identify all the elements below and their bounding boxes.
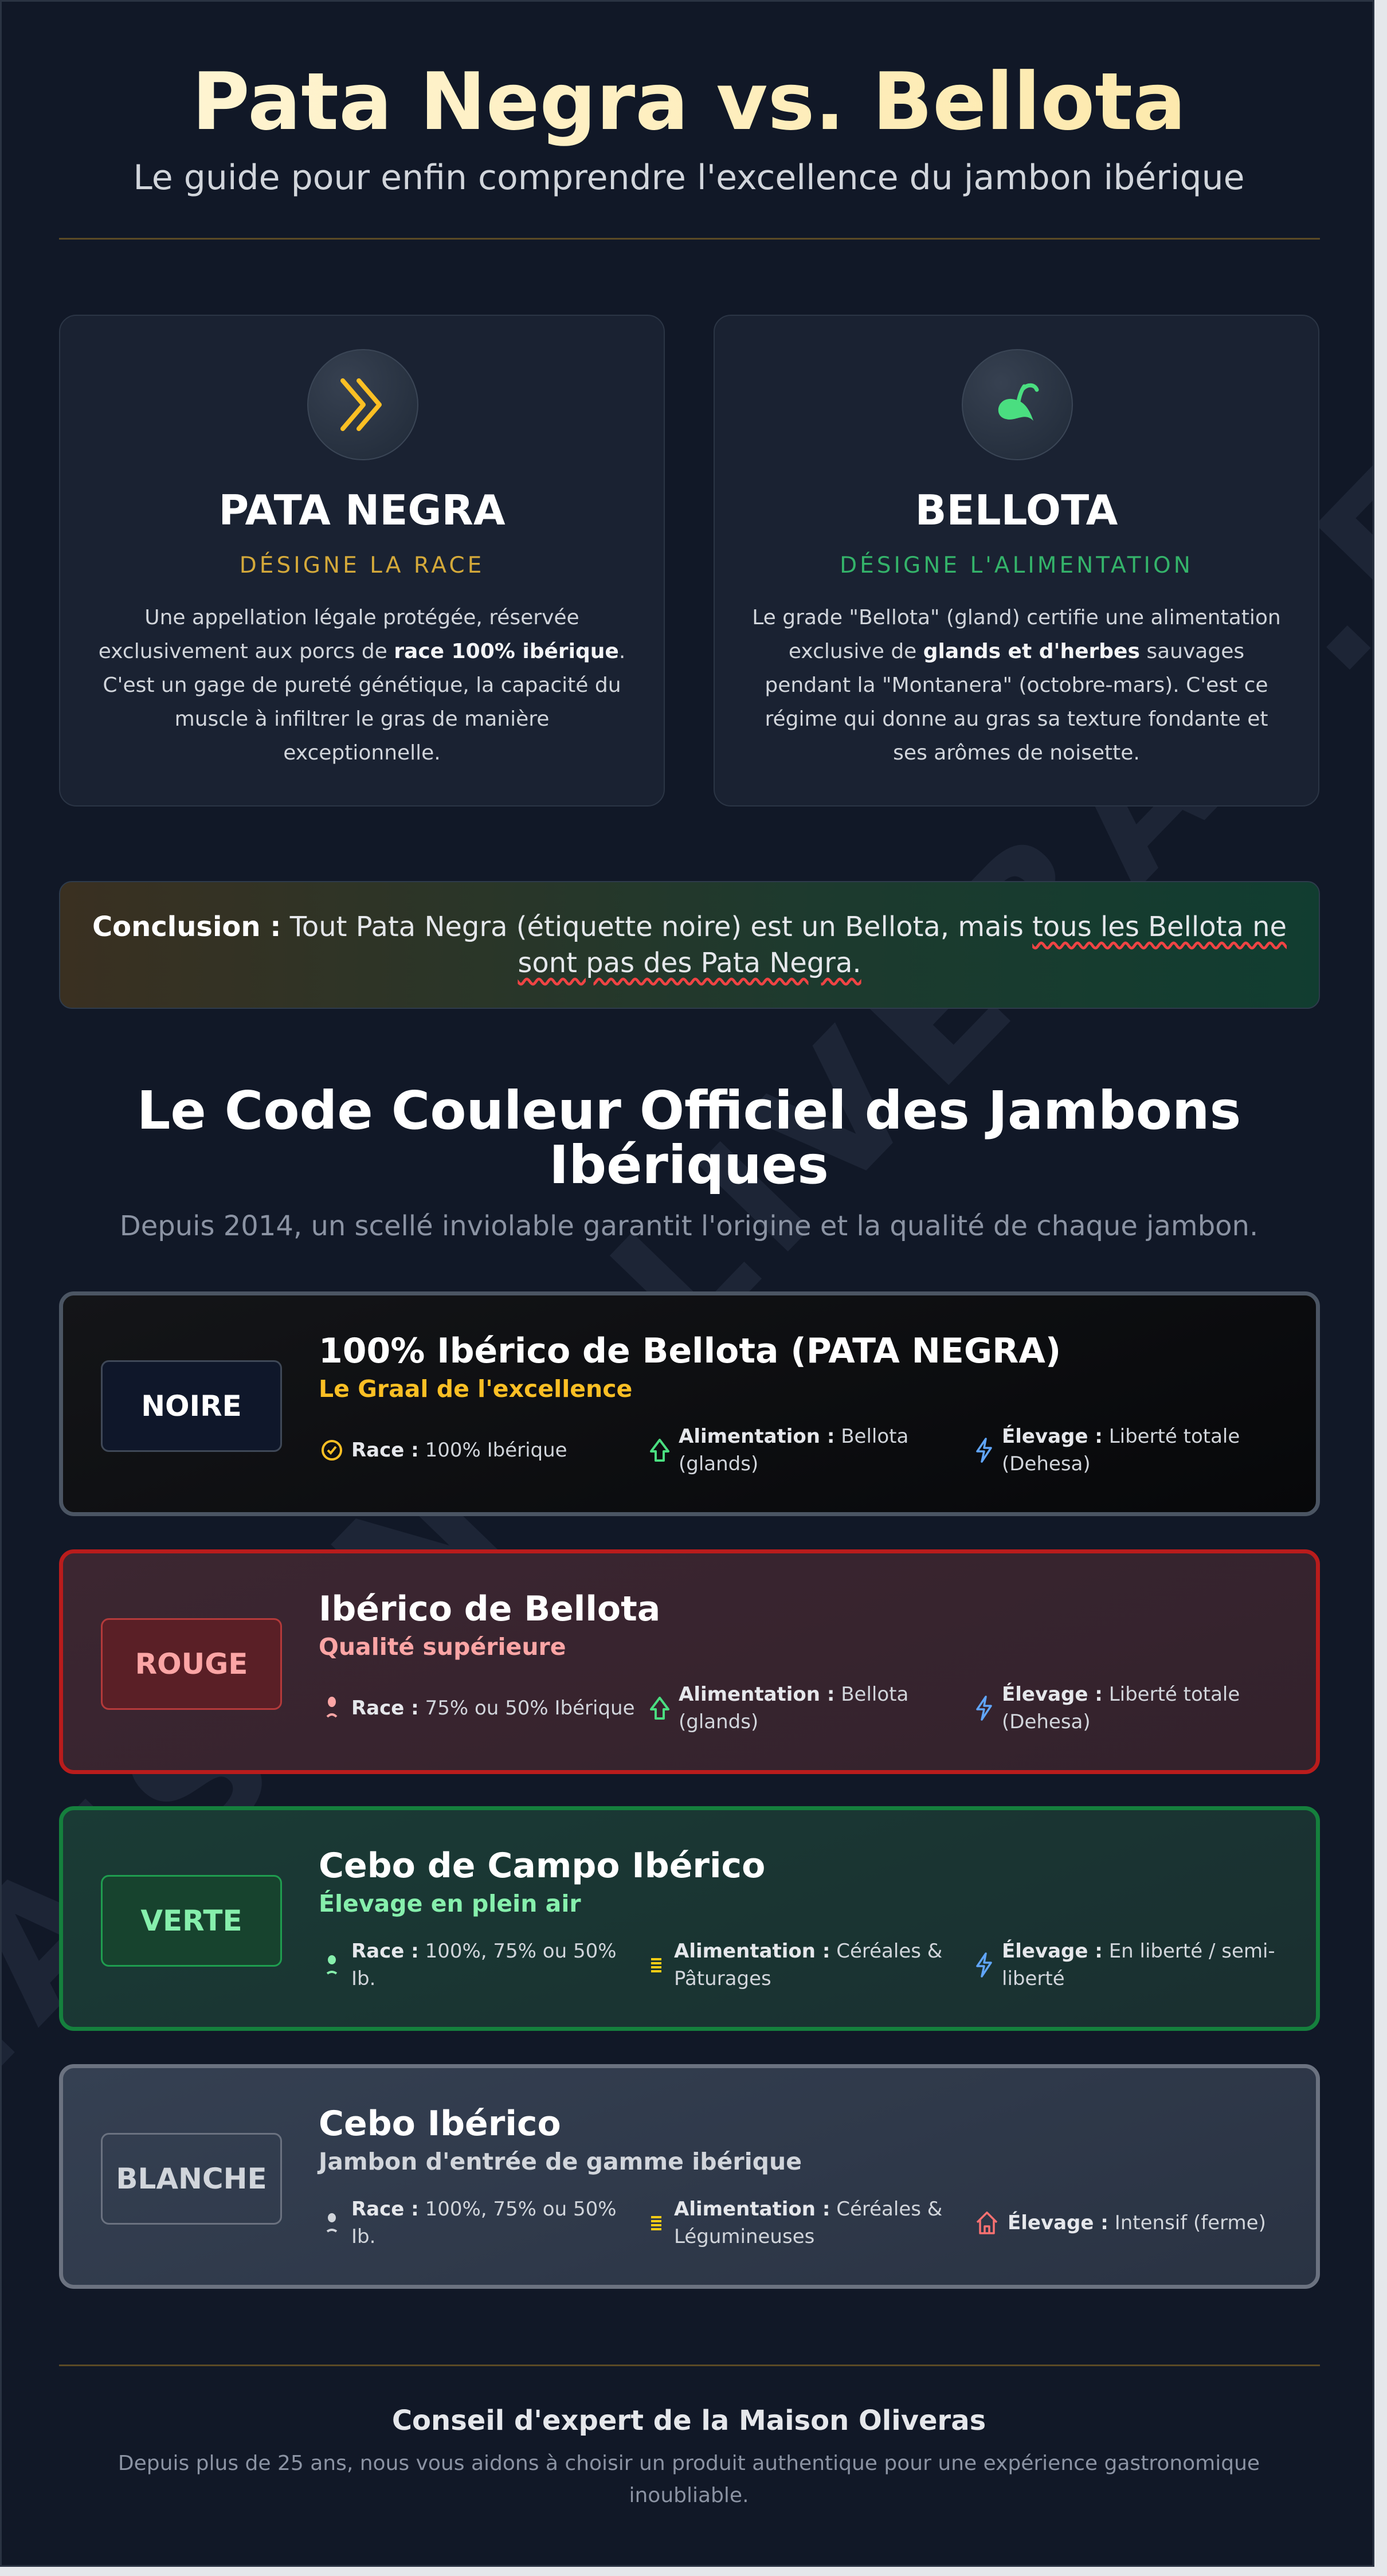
tier title: Ibérico de Bellota [319,1589,660,1629]
feature: race: Race : 100%, 75% ou 50% [351,1940,617,1963]
footer text: Depuis plus de 25 ans, nous vous aidons à choisir un produit authentique pour une expérience gastronomique [118,2452,1260,2475]
badge: VERTE [140,1904,242,1937]
badge: ROUGE [135,1647,248,1681]
text block: Le grade "Bellota" (gland) certifie une alimentation [752,606,1281,629]
subtitle: Le guide pour enfin comprendre l'excellence du jambon ibérique [133,158,1245,198]
footer text [118,2452,1260,2507]
panel: pata negra [59,315,665,807]
footer heading: Conseil d'expert de la Maison Oliveras [392,2405,986,2437]
feature: elevage: (Dehesa) [1002,1453,1091,1475]
feature: alimentation: Pâturages [674,1967,771,1990]
feature: elevage [976,1683,1240,1733]
icon: acorn leaf [962,349,1073,460]
tagline: DÉSIGNE LA RACE [240,553,484,578]
feature: alimentation: (glands) [679,1453,758,1475]
text block: ses arômes de noisette. [893,741,1140,765]
text block: exclusive de glands et d'herbes sauvages [789,640,1244,663]
subtitle: depuis 2014: Depuis 2014, un scellé inviolable garantit l'origine et la qualité de chaque jambon. [120,1210,1258,1242]
badge: BLANCHE [116,2162,267,2195]
badge: NOIRE [141,1389,242,1423]
feature: elevage [976,1425,1240,1475]
text block: Une appellation légale protégée, réservée [144,606,579,629]
feature: race: Race : 75% ou 50% Ibérique [351,1697,635,1720]
feature: elevage: Élevage : Intensif (ferme) [1008,2211,1266,2234]
heading: BELLOTA [915,486,1118,534]
tier subtitle: Élevage en plein air [319,1890,581,1917]
feature: alimentation [650,1683,908,1733]
tier subtitle: Qualité supérieure [319,1633,566,1661]
feature: alimentation [651,2198,942,2248]
heading: code couleur: Ibériques [549,1134,829,1196]
feature: elevage: Élevage : Liberté totale [1002,1683,1240,1706]
feature: alimentation: Alimentation : Céréales & [674,1940,942,1963]
text block [99,606,625,765]
heading: PATA NEGRA [218,486,506,534]
feature: race [327,1940,617,1990]
feature: alimentation: (glands) [679,1710,758,1733]
feature: race: Race : 100% Ibérique [351,1439,567,1462]
footer text: inoubliable. [629,2484,749,2507]
callout: conclusion: Conclusion : Tout Pata Negra (étiquette noire) est un Bellota, mais tous les Bellota ne [92,911,1287,943]
callout: conclusion [59,881,1320,1009]
tagline: DÉSIGNE L'ALIMENTATION [840,553,1193,578]
text block: exclusivement aux porcs de race 100% ibérique. [99,640,625,663]
heading: code couleur [137,1080,1241,1196]
badge [101,1360,282,1452]
tier title: Cebo de Campo Ibérico [319,1846,765,1886]
panel: blanche [59,2064,1320,2289]
text block: muscle à infiltrer le gras de manière [175,707,549,731]
badge [101,2133,282,2225]
feature: elevage: (Dehesa) [1002,1710,1091,1733]
feature: alimentation: Alimentation : Bellota [679,1683,908,1706]
tier title: 100% Ibérico de Bellota (PATA NEGRA) [319,1331,1061,1371]
tier subtitle: Jambon d'entrée de gamme ibérique [319,2148,802,2175]
panel: noire [59,1291,1320,1516]
icon: chevrons [307,349,418,460]
tier subtitle: Le Graal de l'excellence [319,1375,632,1403]
heading: code couleur: Le Code Couleur Officiel des Jambons [137,1080,1241,1141]
feature: alimentation: Alimentation : Bellota [679,1425,908,1448]
feature: race: Ib. [351,2225,375,2248]
feature: alimentation: Alimentation : Céréales & [674,2198,942,2221]
badge [101,1618,282,1710]
feature: race [327,2198,617,2248]
text block: exceptionnelle. [283,741,441,765]
text block: pendant la "Montanera" (octobre-mars). C'est ce [765,674,1268,697]
panel: bellota [714,315,1319,807]
feature: alimentation [651,1940,942,1990]
text block: régime qui donne au gras sa texture fondante et [765,707,1268,731]
badge [101,1875,282,1967]
feature: alimentation: Légumineuses [674,2225,814,2248]
callout: conclusion: sont pas des Pata Negra. [518,947,861,979]
feature: elevage: liberté [1002,1967,1065,1990]
feature: elevage [976,1940,1275,1990]
feature: race: Race : 100%, 75% ou 50% [351,2198,617,2221]
text block: C'est un gage de pureté génétique, la capacité du [103,674,621,697]
text block [752,606,1281,765]
feature: elevage: Élevage : Liberté totale [1002,1425,1240,1448]
tier title: Cebo Ibérico [319,2104,561,2144]
feature: race: Ib. [351,1967,375,1990]
title: Pata Negra vs. Bellota [192,56,1186,148]
feature: alimentation [650,1425,908,1475]
panel: verte [59,1806,1320,2031]
feature: elevage: Élevage : En liberté / semi- [1002,1940,1275,1963]
panel: rouge [59,1549,1320,1774]
